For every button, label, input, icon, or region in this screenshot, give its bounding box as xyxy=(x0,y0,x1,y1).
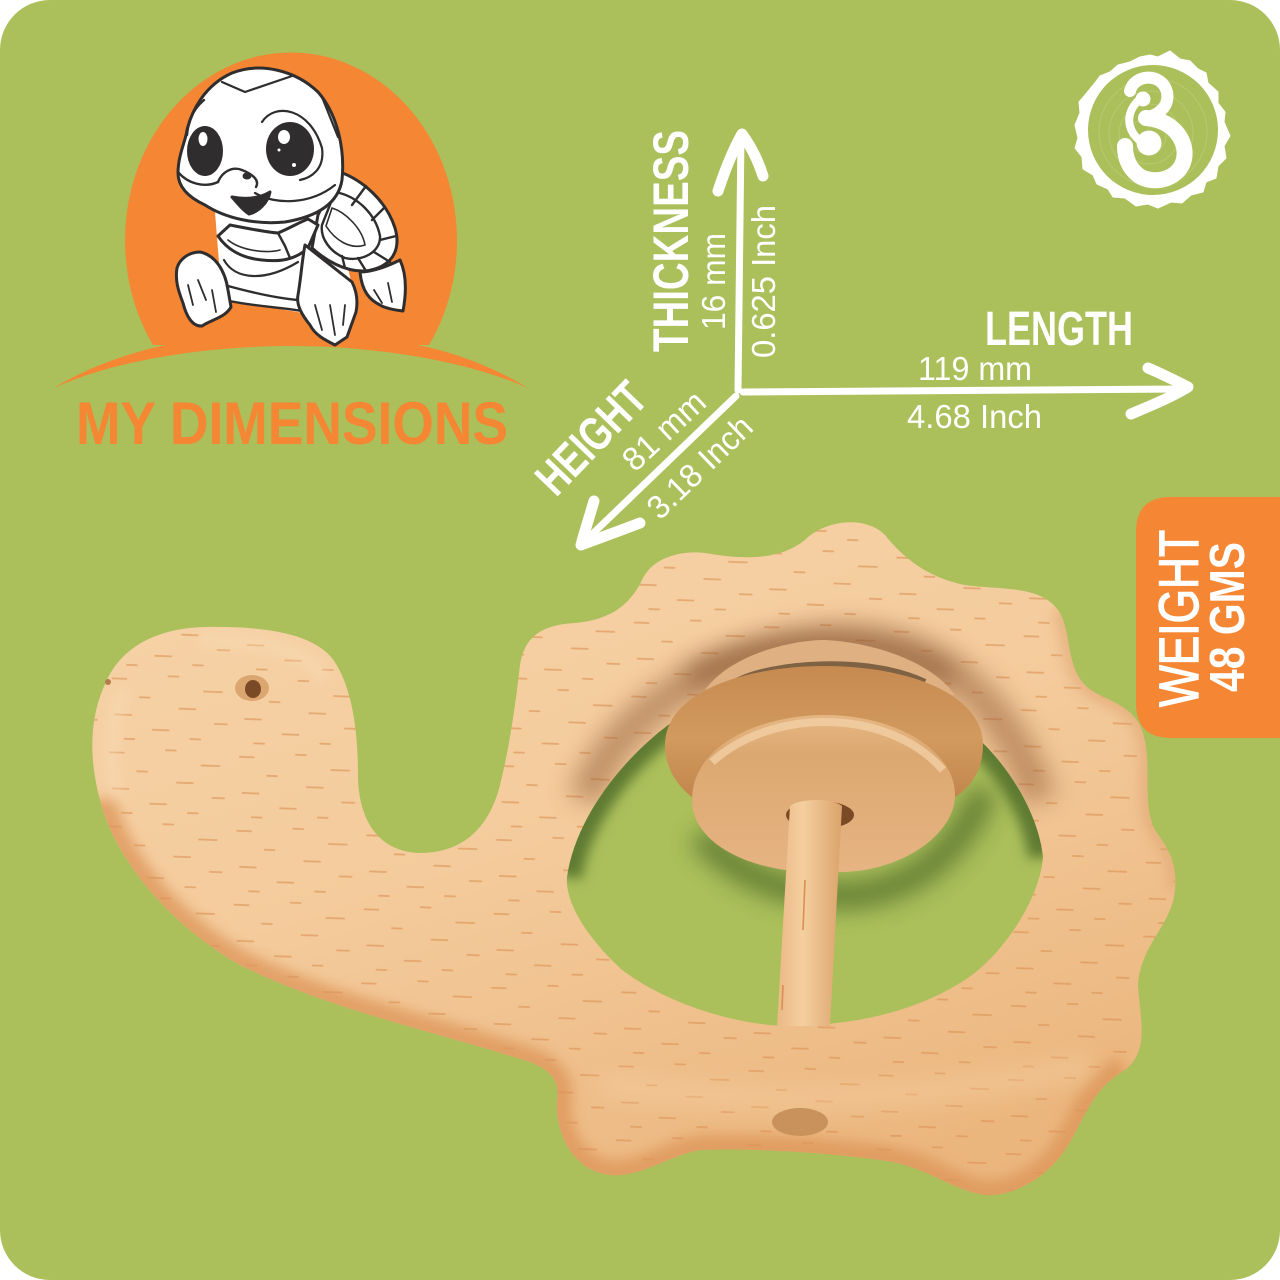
thickness inch: 0.625 Inch xyxy=(745,205,782,358)
orange swoosh xyxy=(54,345,528,388)
height arrow xyxy=(581,396,736,545)
height label xyxy=(526,372,760,526)
weight value: 48 GMS xyxy=(1201,542,1255,692)
turtle illustration xyxy=(176,68,405,345)
dowel stick xyxy=(777,800,842,1026)
length arrow xyxy=(743,368,1188,414)
dimension arrows xyxy=(581,134,1188,545)
length label xyxy=(907,303,1133,435)
weight tag: WEIGHT xyxy=(1147,530,1210,707)
orange sun xyxy=(125,53,457,345)
wood ring and head body xyxy=(80,510,1190,1210)
head peg hole xyxy=(235,675,269,701)
weight tag xyxy=(1136,497,1280,738)
length mm: 119 mm xyxy=(918,350,1032,387)
height mm: 81 mm xyxy=(615,383,713,478)
front disc xyxy=(692,715,955,872)
thickness arrow xyxy=(718,134,763,390)
turtle eye mark xyxy=(105,679,111,685)
turtle mascot logo xyxy=(54,53,528,457)
thickness label: THICKNESS xyxy=(643,130,699,352)
length label: LENGTH xyxy=(985,303,1133,356)
wooden turtle rattle xyxy=(80,510,1190,1210)
brand logo xyxy=(1075,51,1230,208)
hole shadow xyxy=(567,722,1043,896)
length inch: 4.68 Inch xyxy=(907,398,1042,435)
back disc xyxy=(665,640,983,810)
title: my dimensions: MY DIMENSIONS xyxy=(76,390,508,457)
thickness label xyxy=(643,130,782,358)
height inch: 3.18 Inch xyxy=(639,408,760,526)
pin end xyxy=(772,1108,828,1136)
thickness mm: 16 mm xyxy=(695,233,732,330)
height label: HEIGHT xyxy=(526,372,658,506)
